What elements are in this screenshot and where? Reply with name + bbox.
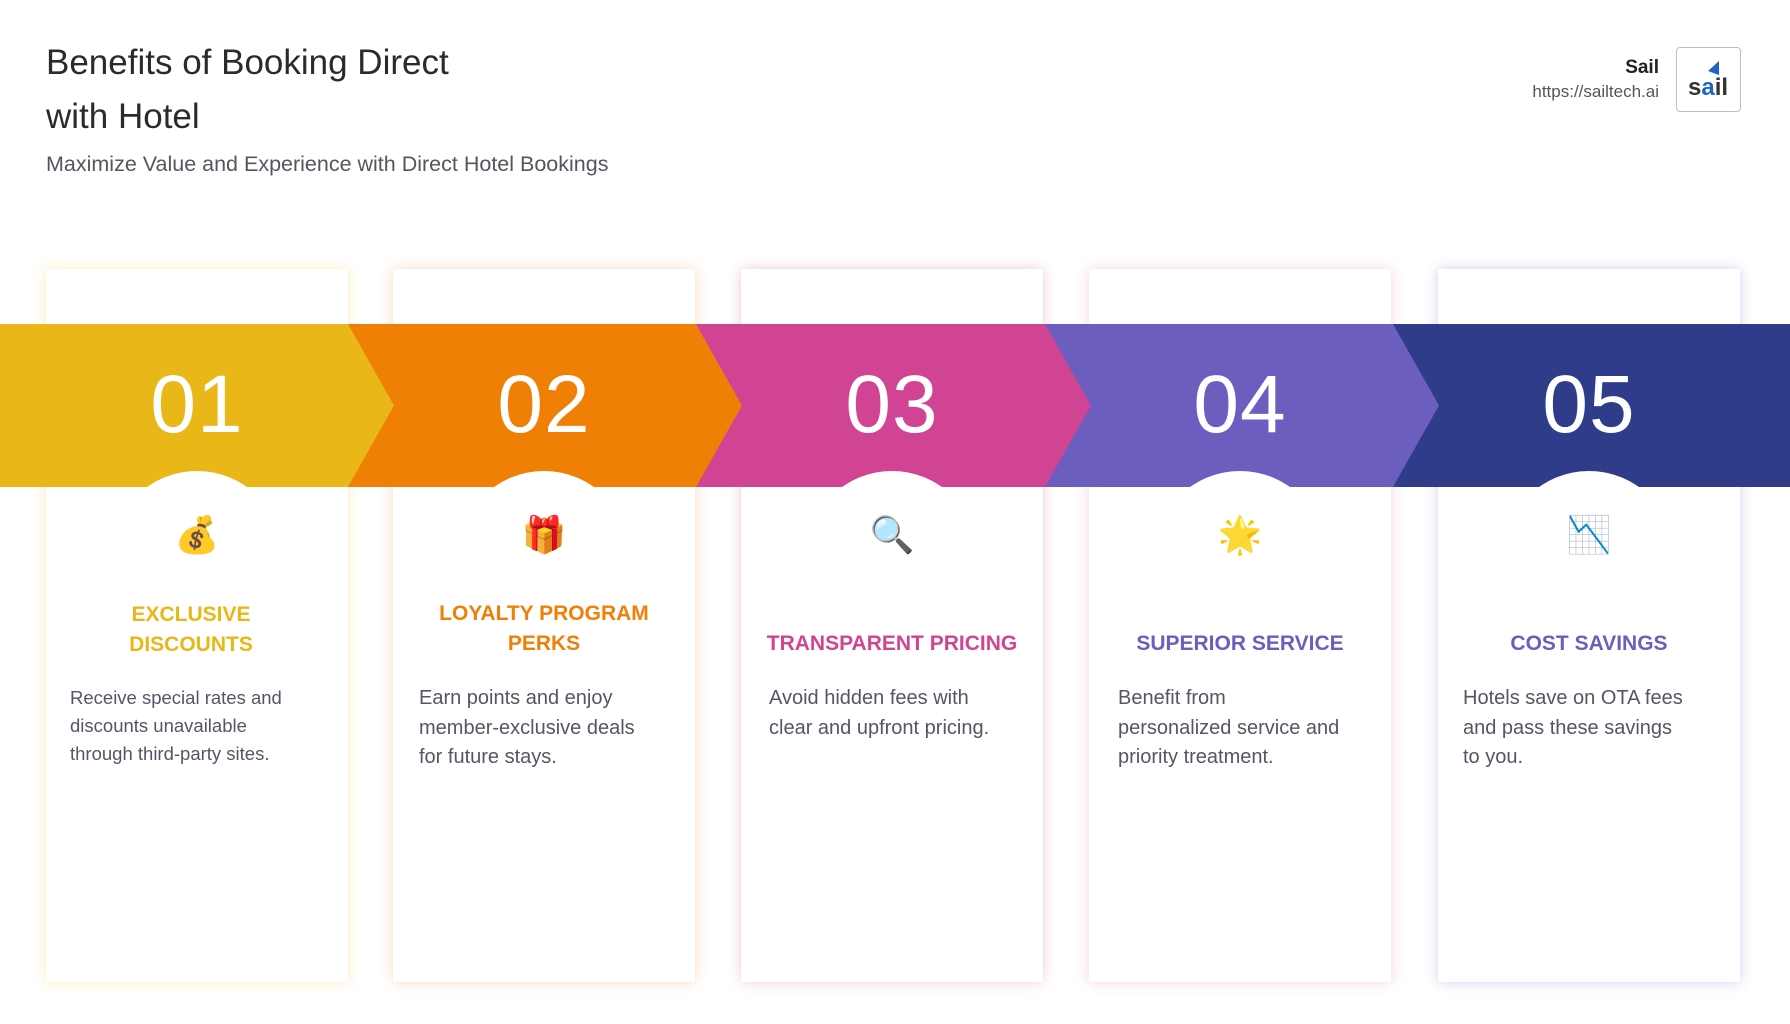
brand text: Sail: [1625, 57, 1659, 78]
heading: PERKS: [508, 632, 580, 655]
panel: 03 transparent: [767, 359, 1017, 738]
heading: [439, 602, 649, 655]
text block: [769, 687, 989, 738]
text block: [1463, 687, 1683, 768]
icon: star: 🌟: [1218, 514, 1262, 555]
icon: gift: 🎁: [522, 514, 566, 555]
text block: priority treatment.: [1118, 746, 1274, 768]
text block: personalized service and: [1118, 716, 1339, 738]
arrow band: [0, 324, 1790, 487]
panel: 05 cost savings: [1463, 359, 1683, 768]
title: [46, 43, 449, 136]
text block: Benefit from: [1118, 687, 1226, 709]
title: Benefits of Booking Direct: [46, 43, 449, 82]
text block: [1118, 687, 1339, 768]
text block: Hotels save on OTA fees: [1463, 687, 1683, 709]
card 1: [46, 269, 348, 982]
brand text: https://sailtech.ai: [1532, 82, 1659, 101]
panel: 01 exclusive discounts: [70, 359, 282, 764]
text block: to you.: [1463, 746, 1523, 768]
number 05: 05: [1542, 359, 1636, 450]
number 02: 02: [497, 359, 591, 450]
icon: magnifier: 🔍: [870, 514, 914, 555]
brand text: [1532, 57, 1659, 101]
text block: through third-party sites.: [70, 743, 269, 764]
number 01: 01: [150, 359, 244, 450]
heading: COST SAVINGS: [1510, 632, 1668, 655]
panel: 04 service: [1118, 359, 1344, 768]
text block: [419, 687, 635, 768]
text block: Receive special rates and: [70, 687, 282, 708]
panel: 02 loyalty: [419, 359, 649, 768]
heading: [129, 603, 253, 656]
logo: sail: [1688, 74, 1728, 101]
card 3: [741, 269, 1043, 982]
logo: [1676, 47, 1741, 112]
card 4: [1089, 269, 1391, 982]
heading: TRANSPARENT PRICING: [767, 632, 1017, 655]
heading: LOYALTY PROGRAM: [439, 602, 649, 625]
heading: DISCOUNTS: [129, 633, 253, 656]
icon: chart decreasing: 📉: [1567, 514, 1611, 555]
number 03: 03: [845, 359, 939, 450]
text block: discounts unavailable: [70, 715, 247, 736]
subtitle: Maximize Value and Experience with Direct Hotel Bookings: [46, 152, 608, 176]
title: with Hotel: [46, 97, 200, 136]
text block: and pass these savings: [1463, 716, 1672, 738]
card 2: [393, 269, 695, 982]
text block: Earn points and enjoy: [419, 687, 612, 709]
icon: money bag: 💰: [175, 514, 219, 555]
text block: member-exclusive deals: [419, 716, 635, 738]
number 04: 04: [1193, 359, 1287, 450]
text block: Avoid hidden fees with: [769, 687, 969, 709]
text block: clear and upfront pricing.: [769, 716, 989, 738]
card 5: [1438, 269, 1740, 982]
text block: [70, 687, 282, 764]
heading: SUPERIOR SERVICE: [1136, 632, 1344, 655]
heading: EXCLUSIVE: [131, 603, 251, 626]
text block: for future stays.: [419, 746, 557, 768]
